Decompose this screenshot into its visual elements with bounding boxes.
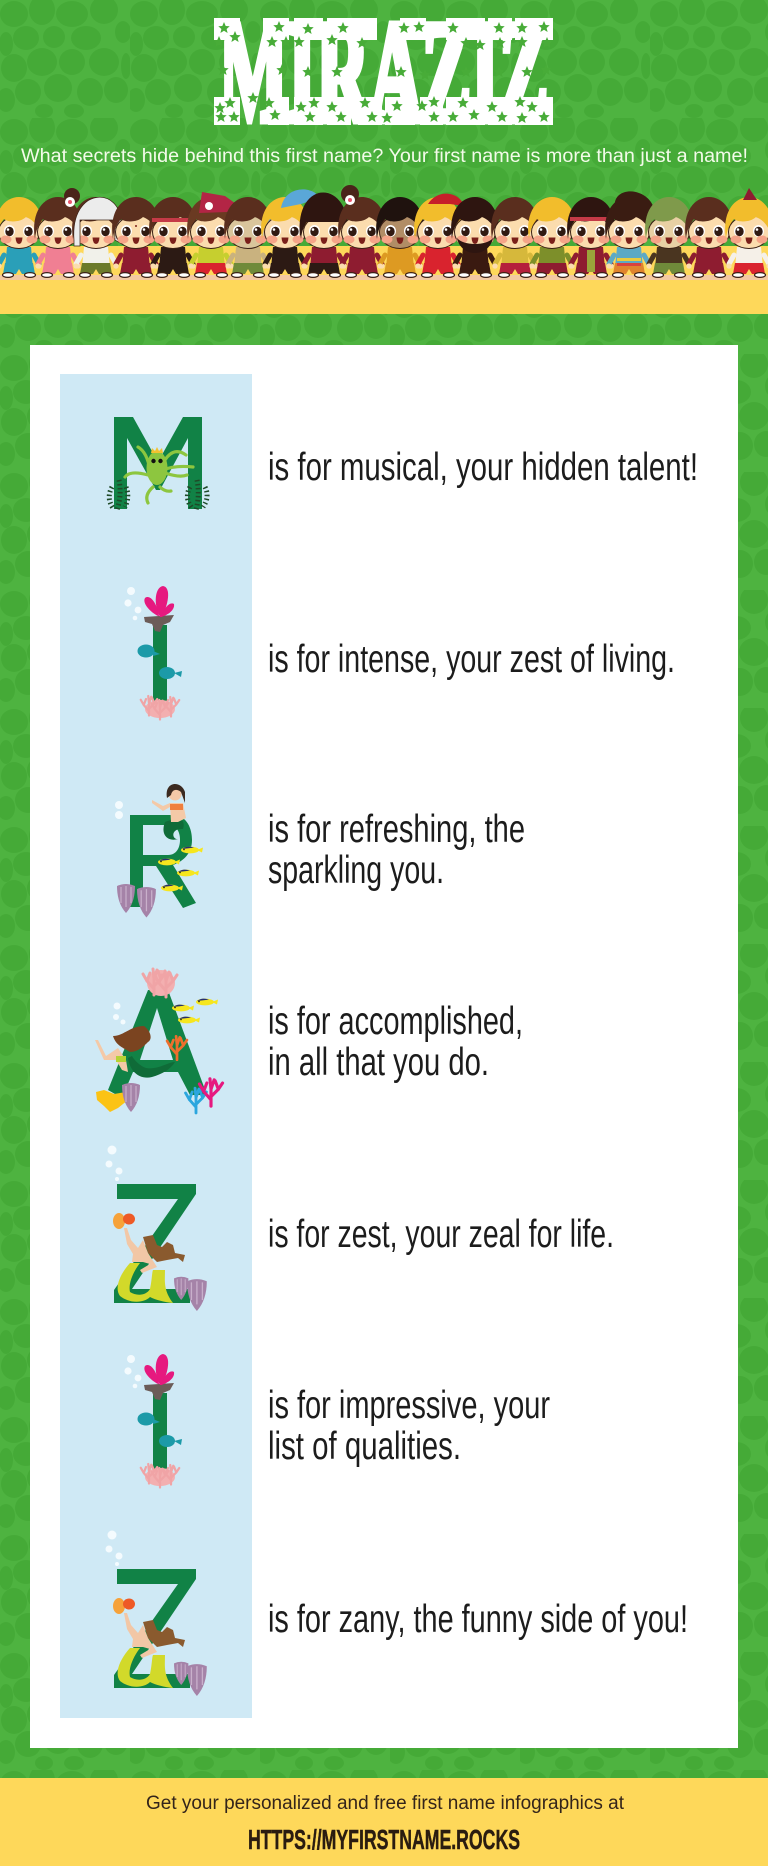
- subtitle: What secrets hide behind this first name? Your first name is more than just a name!: [21, 146, 748, 167]
- row of cartoon children: [0, 185, 768, 280]
- pink coral top: [143, 969, 177, 997]
- mermaid tail: [128, 1056, 175, 1078]
- letter Z with mermaid: [106, 1146, 207, 1311]
- meaning: R: [268, 808, 525, 892]
- yellow fish: [158, 847, 203, 891]
- seaweed: [109, 480, 207, 510]
- meaning: A: [268, 1000, 523, 1084]
- orange coral: [167, 1036, 187, 1060]
- mermaid on R: [152, 784, 186, 840]
- octopus: [125, 447, 193, 503]
- meaning: A: in all that you do.: [268, 1041, 489, 1084]
- letter Z repeated: [106, 1530, 207, 1696]
- R shape: [130, 815, 196, 908]
- bubbles: [113, 1002, 126, 1024]
- footer text: Get your personalized and free first name infographics at: [146, 1793, 625, 1814]
- blue letter column: [60, 374, 252, 1718]
- bikini: [116, 1056, 126, 1062]
- purple coral: [122, 1083, 140, 1112]
- yellow fish: [172, 999, 218, 1023]
- footer URL: HTTPS://MYFIRSTNAME.ROCKS: [248, 1824, 520, 1855]
- M shape: [114, 417, 202, 509]
- meaning: I second: is for impressive, your: [268, 1384, 550, 1427]
- yellow ground band: [0, 246, 768, 314]
- meaning: I second: [268, 1384, 550, 1468]
- A shape: [108, 990, 207, 1098]
- title stars: [213, 21, 553, 123]
- letter R with mermaid: [115, 784, 203, 918]
- footer band: [0, 1778, 768, 1866]
- blue coral: [186, 1088, 206, 1113]
- letter A with mermaid and corals: [95, 969, 223, 1113]
- meaning: I second: list of qualities.: [268, 1425, 461, 1468]
- title slabs: [214, 18, 553, 125]
- white main panel: [30, 345, 738, 1748]
- purple coral: [117, 884, 156, 918]
- letter I with volcano and fish: [124, 586, 182, 720]
- magenta coral: [199, 1079, 223, 1106]
- letter M with octopus: [109, 417, 207, 510]
- meaning: R: is for refreshing, the: [268, 808, 525, 851]
- mermaid hair: [113, 1026, 151, 1052]
- mermaid body: [95, 1040, 128, 1072]
- meaning: Z: is for zest, your zeal for life.: [268, 1213, 614, 1256]
- yellow coral: [96, 1090, 128, 1112]
- bubbles: [115, 801, 123, 819]
- meaning: A: is for accomplished,: [268, 1000, 523, 1043]
- letter I repeated: [124, 1354, 182, 1488]
- meaning: R: sparkling you.: [268, 849, 444, 892]
- title: MIRAZIZ: [213, 0, 553, 152]
